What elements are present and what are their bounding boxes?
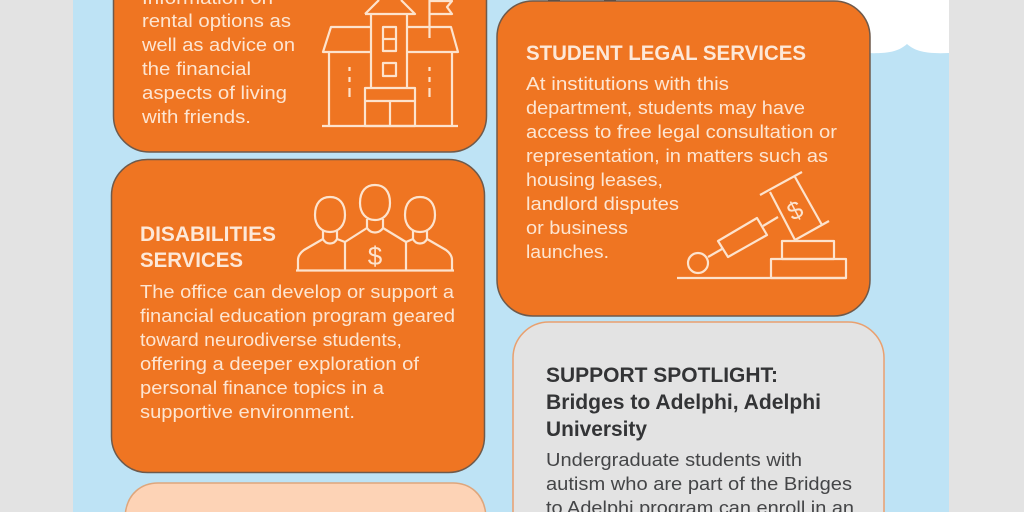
disabilities body text: financial education program geared bbox=[140, 305, 455, 326]
disabilities heading bbox=[140, 223, 276, 272]
spotlight heading: Bridges to Adelphi, Adelphi bbox=[546, 391, 821, 414]
legal body text bbox=[526, 73, 837, 262]
housing body text bbox=[141, 0, 295, 127]
disabilities body text: personal finance topics in a bbox=[140, 377, 385, 398]
panel: student legal services bbox=[497, 1, 870, 316]
housing body text: the financial bbox=[142, 58, 251, 79]
spotlight heading: SUPPORT SPOTLIGHT: bbox=[546, 364, 778, 387]
icon: three people with dollar sign: $ bbox=[368, 241, 383, 271]
spotlight body text bbox=[546, 449, 854, 512]
legal body text: housing leases, bbox=[526, 169, 663, 190]
legal body text: At institutions with this bbox=[526, 73, 729, 94]
spotlight body text: Undergraduate students with bbox=[546, 449, 802, 470]
housing body text: aspects of living bbox=[142, 82, 287, 103]
legal heading: STUDENT LEGAL SERVICES bbox=[526, 42, 806, 65]
legal body text: launches. bbox=[526, 241, 609, 262]
panel: housing services bbox=[114, 0, 486, 152]
spotlight body text: autism who are part of the Bridges bbox=[546, 473, 852, 494]
disabilities heading: SERVICES bbox=[140, 249, 243, 272]
icon: gavel with dollar sign: $ bbox=[783, 195, 808, 227]
disabilities heading: DISABILITIES bbox=[140, 223, 276, 246]
disabilities body text: The office can develop or support a bbox=[140, 281, 455, 302]
disabilities body text bbox=[140, 281, 455, 422]
housing body text: well as advice on bbox=[141, 34, 295, 55]
housing body text: rental options as bbox=[142, 10, 291, 31]
legal body text: or business bbox=[526, 217, 628, 238]
disabilities body text: offering a deeper exploration of bbox=[140, 353, 420, 374]
spotlight heading: University bbox=[546, 418, 647, 441]
cloud bbox=[780, 0, 949, 53]
housing body text: with friends. bbox=[141, 106, 251, 127]
disabilities body text: supportive environment. bbox=[140, 401, 355, 422]
panel: peach card bbox=[126, 483, 486, 512]
disabilities body text: toward neurodiverse students, bbox=[140, 329, 402, 350]
icon: building bbox=[322, 0, 458, 126]
legal body text: access to free legal consultation or bbox=[526, 121, 837, 142]
icon: three people with dollar sign bbox=[296, 185, 454, 271]
panel: disabilities services bbox=[112, 160, 484, 472]
legal body text: representation, in matters such as bbox=[526, 145, 828, 166]
figures peeking above legal card bbox=[548, 0, 616, 2]
spotlight heading bbox=[546, 364, 821, 441]
panel: support spotlight bbox=[513, 322, 884, 512]
legal body text: landlord disputes bbox=[526, 193, 679, 214]
icon: gavel with dollar sign bbox=[677, 172, 846, 278]
legal body text: department, students may have bbox=[526, 97, 805, 118]
